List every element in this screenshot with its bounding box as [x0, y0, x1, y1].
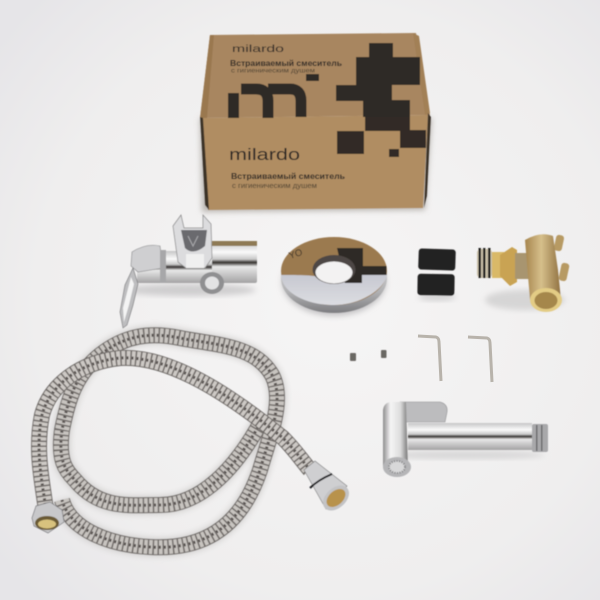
- brass valve body: [477, 234, 570, 312]
- dark squares: [337, 248, 386, 283]
- lever handle: [120, 268, 138, 328]
- vertical tube: [525, 234, 561, 300]
- large m logo: [234, 74, 319, 118]
- lid text: с гигиеническим душем: [231, 68, 315, 74]
- round flange: YO: [288, 247, 304, 262]
- threaded end: [532, 424, 548, 452]
- front text: Встраиваемый смеситель: [231, 171, 345, 181]
- lid text: milardo: [232, 43, 284, 55]
- shower lever: [400, 402, 447, 422]
- hose strand one: [61, 335, 277, 547]
- allen keys: [418, 336, 492, 382]
- pixel pattern: [336, 43, 426, 157]
- hand shower: [383, 402, 548, 477]
- hose holder clip: [173, 215, 212, 268]
- flexible steel hose: [39, 335, 310, 547]
- flange rim: [281, 243, 387, 313]
- set screws: [350, 350, 386, 361]
- chrome face: [281, 275, 387, 305]
- knob: [200, 272, 224, 294]
- round flange: [281, 237, 387, 316]
- brown film: [281, 237, 387, 305]
- box lid: [200, 33, 430, 118]
- front text: с гигиеническим душем: [232, 183, 317, 190]
- flange hole: [312, 255, 356, 284]
- hose cone fitting: [304, 461, 354, 515]
- left cylinder: [137, 251, 217, 283]
- hose strand two: [39, 358, 310, 510]
- side nibs: [553, 234, 565, 252]
- threaded opening: [530, 288, 562, 312]
- front text: [229, 145, 345, 190]
- right cylinder: [212, 242, 257, 283]
- lid text: [230, 43, 342, 74]
- stem: [477, 249, 492, 278]
- black rubber sleeves: [417, 248, 456, 301]
- shower tube: [408, 423, 532, 450]
- box front: [202, 115, 428, 210]
- lid text: Встраиваемый смеситель: [230, 59, 342, 68]
- lever cap: [131, 245, 163, 272]
- cardboard box: [200, 33, 432, 212]
- hose nut: [32, 502, 64, 533]
- shower head: [383, 402, 408, 468]
- mixer body with handle: [120, 215, 257, 328]
- front text: milardo: [229, 145, 300, 164]
